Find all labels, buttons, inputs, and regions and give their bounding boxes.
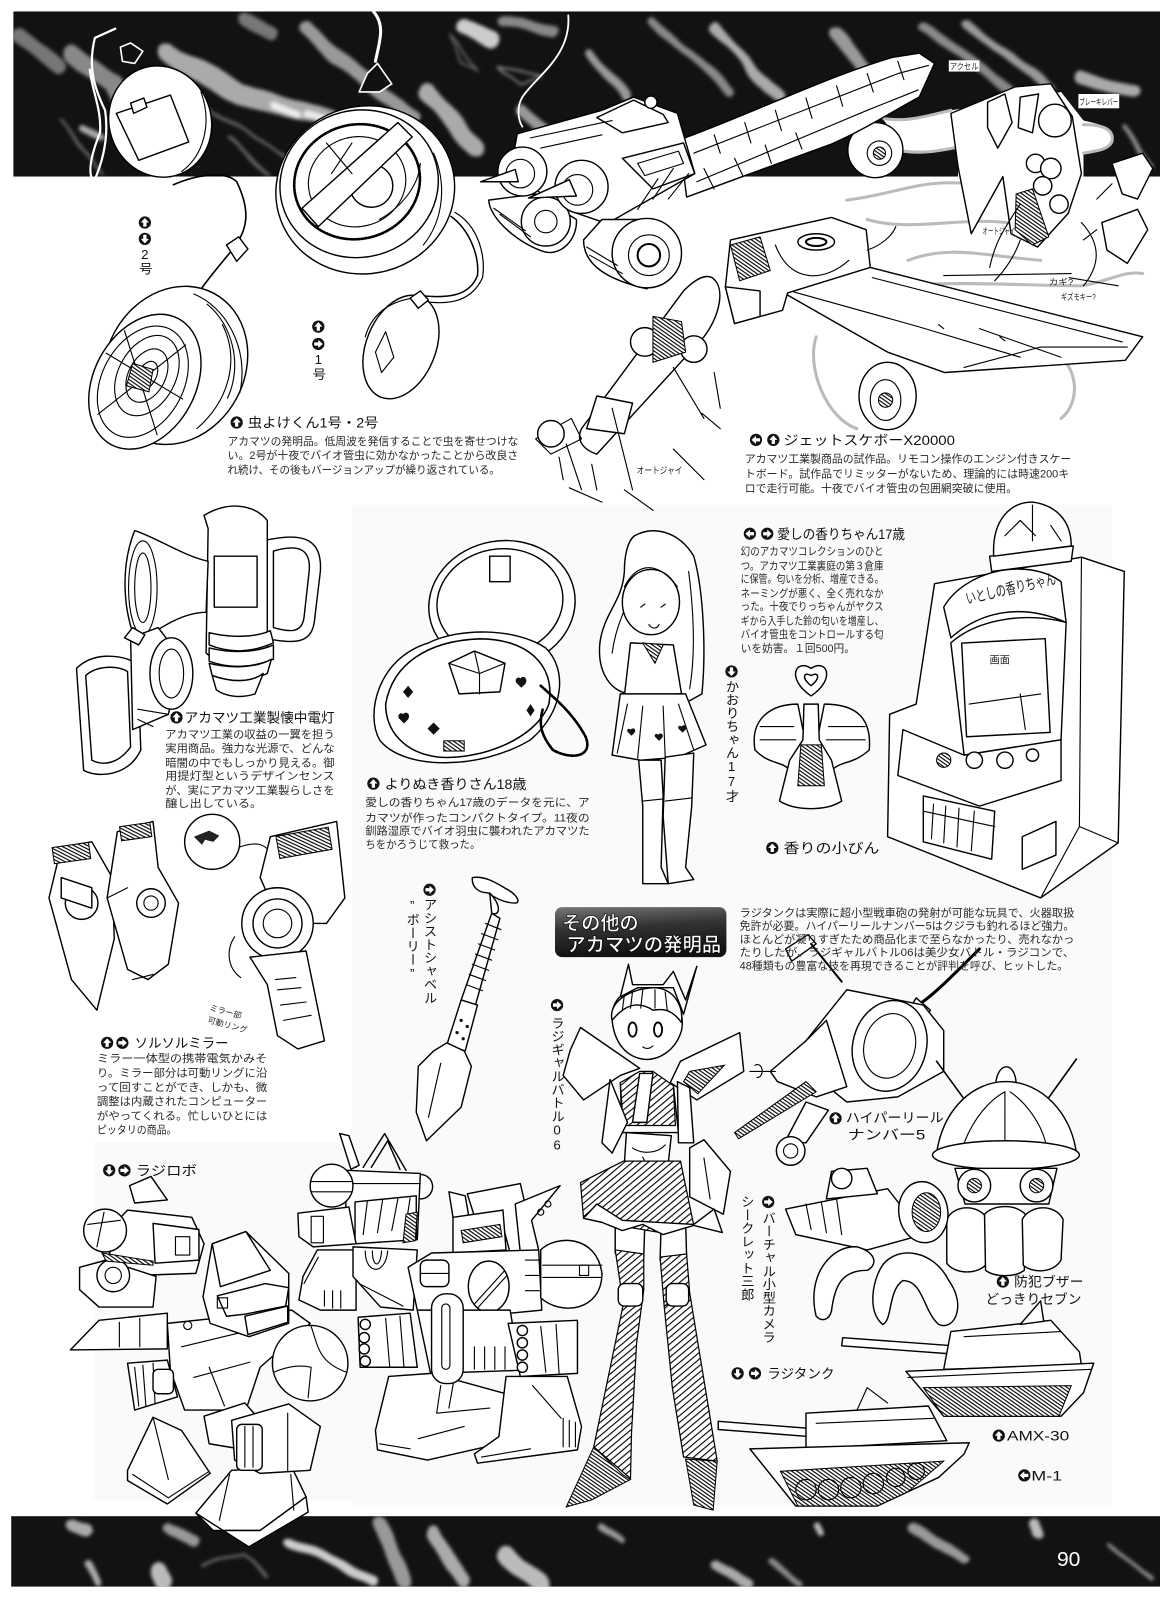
arcade machine: 画面 xyxy=(990,655,1010,666)
label: AMX-30: AMX-30 xyxy=(1007,1429,1069,1444)
label: assist shovel: ”ボーリー” xyxy=(405,898,420,981)
hand labels: オートジャイ xyxy=(982,226,1015,236)
caption: flashlight xyxy=(165,710,335,810)
caption: Itoshi no Kaori-chan: つ。アカマツ工業裏庭の第３倉庫 xyxy=(741,558,884,572)
caption: mirror shaver: ソルソルミラー xyxy=(135,1036,229,1051)
hand labels: ブレーキレバー xyxy=(1079,96,1118,107)
AMX-30 tank xyxy=(842,1301,1094,1416)
crime buzzer Dokkiri Seven xyxy=(932,1059,1079,1276)
caption: bug repellers xyxy=(228,416,518,477)
caption: mirror shaver: り。ミラー部分は可動リングに沿 xyxy=(97,1065,267,1079)
caption: flashlight: 用提灯型というデザインセンス xyxy=(165,769,335,783)
caption: Itoshi no Kaori-chan: 愛しの香りちゃん17歳 xyxy=(777,527,905,542)
intro text block: たりしたが、ラジギャルバトル06は美少女バトル・ラジコンで、 xyxy=(740,945,1074,959)
remote controller sketch xyxy=(944,60,1153,302)
label: No.2: 2号 xyxy=(137,247,152,276)
shovel xyxy=(416,877,518,1141)
label: Radio Tank xyxy=(732,1366,835,1381)
Radio Robo large figure xyxy=(298,1134,602,1463)
virtual small camera Secret Saburo xyxy=(786,1168,958,1326)
bug repeller No.1 wheel xyxy=(257,11,474,294)
bottom decorative dark band xyxy=(11,1516,1160,1587)
heading banner xyxy=(555,907,726,957)
caption: compact mirror: 釧路湿原でバイオ羽虫に襲われたアカマツた xyxy=(365,824,590,838)
heading banner: アカマツの発明品 xyxy=(566,934,721,955)
caption: compact mirror: ちをかろうじて救った。 xyxy=(365,837,481,851)
caption: mirror shaver: 調整は内蔵されたコンピューター xyxy=(97,1094,267,1108)
Radio Gal Battle figure xyxy=(563,964,744,1510)
arcade machine xyxy=(888,502,1124,898)
label: crime buzzer xyxy=(986,1274,1083,1307)
label: Radio Tank: ラジタンク xyxy=(767,1366,835,1381)
hand labels: アクセル xyxy=(950,62,979,72)
caption: flashlight: アカマツ工業の収益の一翼を担う xyxy=(165,727,335,741)
Hyper Reel Number 5 xyxy=(735,935,979,1165)
Radio Robo front figure xyxy=(128,1232,348,1547)
label: virtual small camera: シークレット三郎 xyxy=(739,1195,754,1301)
caption: bug repellers: 虫よけくん1号・2号 xyxy=(248,416,379,431)
intro text block: ほとんどが凝りすぎたため商品化まで至らなかったり、売れなかっ xyxy=(740,932,1074,946)
caption: Itoshi no Kaori-chan: ネーミングが悪く、全く売れなか xyxy=(741,586,884,600)
caption: bug repellers: い。2号が十夜でバイオ管虫に効かなかったことから改良さ xyxy=(228,448,518,462)
label: assist shovel: アシストシャベル xyxy=(422,898,437,1004)
caption: Itoshi no Kaori-chan: った。十夜でりっちゃんがヤクス xyxy=(741,599,884,613)
caption: mirror shaver: ピッタリの商品。 xyxy=(97,1124,176,1137)
label: Radio Robo: ラジロボ xyxy=(136,1163,197,1178)
hand labels: カギ? xyxy=(1049,277,1073,287)
label: virtual small camera xyxy=(739,1195,776,1344)
label: M-1 xyxy=(1018,1468,1062,1483)
caption: bug repellers: れ続け、その後もバージョンアップが繰り返されている。 xyxy=(228,463,500,477)
top decorative dark band xyxy=(13,11,1160,177)
caption: jet skateboard xyxy=(745,433,1071,495)
cord between No.2 halves xyxy=(173,175,246,288)
jet skateboard rear view xyxy=(725,217,1143,430)
label: No.2 xyxy=(137,216,152,276)
caption: compact mirror: 愛しの香りちゃん17歳のデータを元に、ア xyxy=(365,795,590,809)
caption: mirror shaver: って回すことができ、しかも、微 xyxy=(97,1080,267,1094)
caption: compact mirror: カマツが作ったコンパクトタイプ。11夜の xyxy=(365,810,590,824)
caption: jet skateboard: トボード。試作品でリミッターがないため、理論的には時速200キ xyxy=(745,467,1069,481)
caption: Itoshi no Kaori-chan: に保管。匂いを分析、増産できる。 xyxy=(741,572,884,586)
shaver mirror right with dial: 可動リング xyxy=(207,1015,249,1035)
label: Hyper Reel Number 5: ハイパーリール xyxy=(846,1110,944,1125)
label: No.1: 1号 xyxy=(311,352,326,381)
label: M-1: M-1 xyxy=(1031,1468,1062,1483)
caption: flashlight: が、実にアカマツ工業製らしさを xyxy=(165,783,335,797)
caption: Itoshi no Kaori-chan: いを妨害。１回500円。 xyxy=(741,642,855,655)
shaver mirror right with dial: ミラー部 xyxy=(209,1003,242,1021)
label: crime buzzer: 防犯ブザー xyxy=(1014,1274,1083,1290)
perfume bottle xyxy=(754,666,870,809)
caption: small perfume bottle: 香りの小びん xyxy=(784,841,879,856)
shaver mirror middle xyxy=(107,821,179,980)
label: crime buzzer: どっきりセブン xyxy=(986,1291,1081,1307)
label: Kaori-chan: かおりちゃん17才 xyxy=(724,679,739,803)
intro text block: ラジタンクは実際に超小型戦車砲の発射が可能な玩具で、火器取扱 xyxy=(740,905,1074,919)
caption: mirror shaver: ミラー一体型の携帯電気かみそ xyxy=(97,1051,267,1065)
hand labels xyxy=(949,60,1119,302)
caption: Itoshi no Kaori-chan xyxy=(741,527,905,655)
caption: Itoshi no Kaori-chan: ギから入手した鈴の匂いを増産し、 xyxy=(741,614,884,628)
No.1 strap and fob xyxy=(349,212,483,410)
hand label in box: オートジャイ xyxy=(637,466,683,476)
caption: compact mirror xyxy=(365,777,590,851)
Kaori-chan figure xyxy=(600,531,706,884)
caption: Itoshi no Kaori-chan: バイオ管虫をコントロールする匂 xyxy=(741,627,884,641)
thighs xyxy=(615,1219,645,1257)
light paper wash behind middle section xyxy=(94,505,1112,1505)
label: Radio Gal Battle 06: ラジギャルバトル06 xyxy=(550,1016,565,1152)
caption: jet skateboard: ジェットスケボーX20000 xyxy=(784,433,955,448)
label: Hyper Reel Number 5: ナンバー5 xyxy=(848,1128,925,1143)
caption: flashlight: 暗闇の中でもしっかり見える。御 xyxy=(165,755,335,769)
intro text block xyxy=(740,905,1074,972)
caption: jet skateboard: アカマツ工業製商品の試作品。リモコン操作のエンジン付きスケー xyxy=(745,451,1071,465)
wavy white splash at top right xyxy=(814,92,1143,429)
shaver mirror right with dial xyxy=(185,814,345,1049)
Radio Robo back figure xyxy=(70,1176,204,1350)
caption: bug repellers: アカマツの発明品。低周波を発信することで虫を寄せつけな xyxy=(228,434,518,448)
label: Hyper Reel Number 5 xyxy=(829,1110,944,1143)
caption: jet skateboard: ロで走行可能。十夜でバイオ管虫の包囲網突破に使用。 xyxy=(745,481,1017,495)
shaver mirror left xyxy=(49,842,114,1010)
caption: mirror shaver xyxy=(97,1036,267,1137)
caption: flashlight: アカマツ工業製懐中電灯 xyxy=(185,710,335,725)
bug repeller No.2 back view xyxy=(90,29,226,191)
label: Radio Robo xyxy=(103,1163,197,1178)
caption: mirror shaver: がやってくれる。忙しいひとには xyxy=(97,1108,267,1122)
bug repeller No.2 wheel xyxy=(66,237,275,470)
intro text block: 免許が必要。ハイパーリールナンバー5はクジラも釣れるほど強力。 xyxy=(740,919,1074,933)
page number: 90 xyxy=(1057,1549,1080,1571)
small flashlight xyxy=(77,628,193,774)
heading banner: その他の xyxy=(562,913,639,934)
compact mirror xyxy=(374,529,587,763)
intro text block: 48種類もの豊富な技を再現できることが評判を呼び、ヒットした。 xyxy=(740,958,1068,972)
label: No.1 xyxy=(311,320,326,381)
M-1 tank xyxy=(718,1388,969,1506)
caption: compact mirror: よりぬき香りさん18歳 xyxy=(385,777,526,792)
skateboard underside with skids xyxy=(536,276,720,510)
jet skateboard main view xyxy=(481,15,935,289)
label: AMX-30 xyxy=(993,1429,1069,1444)
hand labels: ギズモキー? xyxy=(1061,291,1096,302)
label: assist shovel xyxy=(405,884,437,1004)
caption: flashlight: 実用商品。強力な光源で、どんな xyxy=(165,741,335,755)
caption: Itoshi no Kaori-chan: 幻のアカマツコレクションのひと xyxy=(741,545,884,558)
label: virtual small camera: バーチャル小型カメラ xyxy=(761,1211,776,1344)
caption: flashlight: 醸し出している。 xyxy=(165,797,262,810)
arcade machine: いとしの香りちゃん xyxy=(964,571,1058,608)
large flashlight xyxy=(125,506,321,696)
